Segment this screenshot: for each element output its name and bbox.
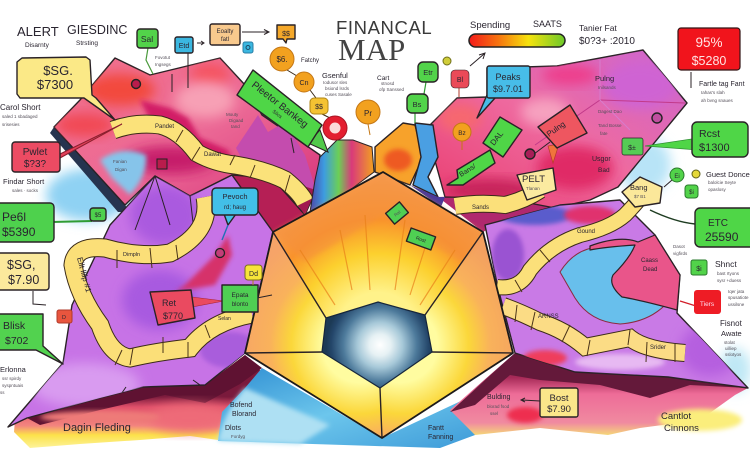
callout: green Rcst $1300: Rcst xyxy=(699,128,720,140)
tag: blue top: Etd xyxy=(179,43,189,50)
marker: orange circle centre xyxy=(356,100,380,135)
marker: ring on road xyxy=(216,248,224,258)
label: Fanian Digan: Digan xyxy=(115,167,127,172)
label: Bulding: ssel xyxy=(490,411,498,416)
callout: green ETC: ETC xyxy=(708,218,728,229)
tag: green box small xyxy=(685,185,698,198)
panel: left rainbow strip xyxy=(310,140,374,212)
heading: alert group: ALERT xyxy=(17,24,59,39)
text: Dasot: vigfirds xyxy=(673,251,688,256)
label: Bulding: blorad fsod xyxy=(487,404,510,409)
label: Fantt Fanning: Fanning xyxy=(428,434,453,441)
callout: red Ret $770: Ret xyxy=(162,298,177,308)
text: Shnct: bast rtyons xyxy=(717,271,740,276)
label: Dagin Fleding: Dagin Fleding xyxy=(63,422,131,434)
marker: dark badge xyxy=(157,159,167,169)
text: Gsenful: Iodusor sles xyxy=(323,80,348,85)
callout: red Ret $770: $770 xyxy=(163,311,183,321)
road: top-left xyxy=(113,124,305,202)
tag: green box Shnct: $i xyxy=(696,266,702,273)
text: Guest Donce: opaslosy xyxy=(708,187,727,192)
callout: yellow $SG, $7.90: $7.90 xyxy=(8,273,39,287)
callout: green Pulsing arrow: DAL xyxy=(488,129,505,147)
arrow: to Bost box xyxy=(521,398,540,402)
marker: orange on right map: Bz xyxy=(458,130,466,137)
title: MAP xyxy=(338,32,405,67)
label: Mouty Digaad: tand xyxy=(231,124,240,129)
label: Pandet: Pandet xyxy=(155,124,174,130)
chain: orange markers xyxy=(270,47,347,140)
text: Gsenful xyxy=(322,71,352,97)
box: PELT xyxy=(517,168,556,200)
callout: Bost $7.90: $7.90 xyxy=(547,404,571,415)
text: red side: ussilsne xyxy=(728,302,745,307)
labels: right map: fate xyxy=(600,131,608,136)
pink area xyxy=(590,235,680,310)
text: Erlonna xyxy=(0,365,27,395)
connector: blue line xyxy=(222,225,228,240)
callout: red Pwlet: Pwlet xyxy=(23,147,47,158)
text: Dasot xyxy=(673,244,688,256)
callout: Bost $7.90 xyxy=(540,388,578,417)
tag: small red: D xyxy=(62,315,66,321)
arrow: peach to orange xyxy=(242,30,269,34)
label: Bofend Blorand: Dlots xyxy=(225,425,241,432)
label: Cantlot Cinnons xyxy=(661,411,699,434)
tag: orange top xyxy=(277,25,295,43)
callout: blue Pevoch: Pevoch xyxy=(222,192,248,201)
panel: bottom-right band xyxy=(450,353,748,435)
text: Guest Donce: balolcie Seyte xyxy=(708,180,737,185)
panel: top-left pink map xyxy=(50,58,320,232)
text: Shnct: Shnct xyxy=(715,259,737,269)
text: Gsenful: Gsenful xyxy=(322,71,348,80)
panel: violet sliver under the blue strip xyxy=(410,185,445,207)
tag: red small: Bl xyxy=(457,77,464,84)
lake xyxy=(560,245,668,324)
tag: green top Sal xyxy=(137,29,158,74)
text: Cart: Cart xyxy=(377,75,389,82)
callout: green Blisk $702 xyxy=(0,314,63,364)
label: Mouty Digaad: Mouty xyxy=(226,112,239,117)
text: red side xyxy=(728,289,749,307)
label: Mouty Digaad: Digaad xyxy=(229,118,244,123)
text: small top: Ingsegs xyxy=(155,62,172,67)
callout: top-left yellow $SG. $7300 xyxy=(17,57,115,120)
marker: dark blob centre xyxy=(525,149,535,159)
text: red side: Iqer jata xyxy=(728,289,745,294)
label: Selan: Selan xyxy=(218,316,231,322)
panel: blue strip xyxy=(413,123,438,197)
text: Tanier Fat xyxy=(579,23,635,47)
labels: right map: Inilsands xyxy=(598,85,617,90)
callout: green Blisk $702: $702 xyxy=(5,335,29,347)
callout: red Ret $770 xyxy=(150,290,224,325)
tag: green Bs xyxy=(407,94,428,123)
tag: small blue xyxy=(243,42,253,53)
tag: yellow small xyxy=(245,265,262,285)
callout: yellow $SG, $7.90: $SG, xyxy=(7,258,36,272)
connector: red tag xyxy=(680,301,696,306)
label: Bofend Blorand: Fordyg xyxy=(231,434,246,439)
panel: right lower map xyxy=(485,200,748,388)
callout: top-left yellow $SG. $7300: $SG. xyxy=(43,63,73,78)
label: Fantt Fanning: Fantt xyxy=(428,425,444,432)
tag: green box small: $i xyxy=(689,190,694,196)
label: Dimpln: Dimpln xyxy=(123,252,140,258)
text: Fartle tag: Iahas's slah xyxy=(701,90,725,95)
legend: spending bar: Spending xyxy=(470,20,510,31)
label: Bofend Blorand: Blorand xyxy=(232,411,256,418)
labels: right map: Dagest Dao xyxy=(598,109,622,114)
text: Tanier Fat: $0?3+ :2010 xyxy=(579,36,635,47)
box: peach top xyxy=(210,24,240,45)
callout: Bost $7.90: Bost xyxy=(549,393,569,404)
label: Cantlot Cinnons: Cinnons xyxy=(664,423,699,434)
panel: left purple map xyxy=(8,175,273,427)
text: red side: spusatiote xyxy=(728,295,749,300)
tag: orange top: $$ xyxy=(282,31,290,38)
box: PELT: Tlanan xyxy=(526,186,540,191)
connector: big green callout xyxy=(291,138,294,153)
panel: right pink map xyxy=(430,50,687,208)
label: Dawat: Dawat xyxy=(204,152,221,158)
tag: red small xyxy=(451,70,469,97)
callout: green Pulsing arrow: Bans/ xyxy=(458,163,477,179)
callout: red 95%: $5280 xyxy=(692,54,726,68)
heading: alert group: Disarnty xyxy=(25,42,50,49)
callout: big green rotated: Silos xyxy=(271,109,283,121)
callout: green Epata: blonto xyxy=(232,302,249,308)
text: Erlonna: ssr spirdy xyxy=(2,376,22,381)
tag: red Tiers xyxy=(694,290,721,314)
heading: alert group xyxy=(17,23,127,49)
text: Fisnot Awate: Awate xyxy=(721,329,742,338)
label: Srider: Srider xyxy=(650,345,666,351)
label: Fanian Digan: Fanian xyxy=(113,159,127,164)
callout: green Epata: Epata xyxy=(232,292,249,299)
callout: blue Peaks: Peaks xyxy=(495,72,521,82)
tag: blue top xyxy=(175,37,193,53)
text: Dasot: Dasot xyxy=(673,244,686,249)
label: Fantt Fanning xyxy=(428,425,453,441)
connector: green chain right xyxy=(664,180,672,187)
callout: green ETC xyxy=(650,208,750,247)
text: Cart xyxy=(377,75,405,92)
panel: central hexagon xyxy=(245,172,513,438)
callout: green ETC: 25590 xyxy=(705,230,739,244)
wash: blue background tints xyxy=(46,137,750,392)
panel: dark wedge under the right map xyxy=(438,195,560,232)
tag: green small xyxy=(622,138,643,155)
labels: right map xyxy=(592,74,622,174)
label: Caass Dead: Dead xyxy=(643,267,657,273)
tag: green Bs: Bs xyxy=(413,100,422,109)
panel: bottom-left band xyxy=(14,355,270,448)
tag: green box Shnct xyxy=(691,260,707,275)
title xyxy=(336,17,432,67)
marker: orange circle centre: Pr xyxy=(364,109,372,118)
text: Tanier Fat: Tanier Fat xyxy=(579,23,617,33)
box: PELT: PELT xyxy=(522,174,545,185)
callout: red 95% xyxy=(678,28,740,70)
box: peach top: fatl xyxy=(221,37,229,43)
title: FINANCAL xyxy=(336,17,432,38)
callout: red Pwlet: $?3? xyxy=(24,159,47,170)
marker: green circle: Ei xyxy=(674,174,680,180)
text: Carol Short: Carol Short xyxy=(0,103,41,112)
label: road vertical text: Eilt lliip #1 xyxy=(75,256,93,294)
callout: red 95%: 95% xyxy=(695,35,723,50)
text: Fisnot Awate: Fisnot xyxy=(720,319,743,328)
labels: right map: Usgor xyxy=(592,156,611,163)
connector: yellow callout xyxy=(33,291,46,305)
marker: circle 2: Cn xyxy=(300,80,309,87)
heading: alert group: Strsting xyxy=(76,40,98,47)
box: Bang label: Bang xyxy=(630,183,648,192)
text: Fisnot Awate xyxy=(720,319,743,357)
callout: green Pe6l $5390: Pe6l xyxy=(2,210,26,224)
tag: green Etr: Etr xyxy=(423,68,433,77)
text: Carol Short: saled 1 sbadaged xyxy=(2,114,38,119)
tag: green on hexagon mid: Rost xyxy=(415,235,427,245)
tag: small green xyxy=(90,208,106,221)
callout: yellow $SG, $7.90 xyxy=(0,253,49,290)
label: Caass Dead xyxy=(641,258,658,273)
callout: green Blisk $702: Blisk xyxy=(3,320,26,332)
callout: red rotated xyxy=(534,105,587,163)
text: Cart: ofp Sanssed xyxy=(379,87,405,92)
labels: right map: Bad xyxy=(598,167,610,174)
label: Mouty Digaad xyxy=(226,112,244,129)
text: Gsenful: cuses Sasale xyxy=(325,92,352,97)
text: Shnct xyxy=(715,259,742,283)
text: small top: Fovotut xyxy=(155,55,171,60)
text: Fartle tag: Fartle tag Fant xyxy=(699,81,745,88)
arrow: to legend xyxy=(470,53,485,66)
road: right upper xyxy=(455,168,556,211)
label: Bofend Blorand: Bofend xyxy=(230,402,252,409)
callout: green Epata xyxy=(222,285,272,312)
panel: bottom-centre blue band xyxy=(218,368,480,448)
callout: blue Pevoch xyxy=(212,188,258,225)
text: Erlonna: Erlonna xyxy=(0,365,27,374)
label: Bofend Blorand xyxy=(225,402,256,439)
text: Findar Short: sales · socks xyxy=(12,188,39,193)
callout: green Pulsing arrow xyxy=(447,117,522,185)
road: left serpentine xyxy=(73,197,252,365)
callout: green Pe6l $5390: $5390 xyxy=(2,225,36,239)
text: Findar Short: Findar Short xyxy=(3,177,45,186)
callout: big green rotated: Pleetor Bankeg xyxy=(249,80,310,130)
callout: green Rcst $1300: $1300 xyxy=(699,142,730,154)
tag: green small: $± xyxy=(628,145,636,152)
marker: red circle xyxy=(323,116,347,140)
marker: yellow dot right xyxy=(692,170,700,178)
marker: dark blob right xyxy=(652,113,662,123)
label: Caass Dead: Caass xyxy=(641,258,658,264)
text: Fartle tag: ah bvng snaues xyxy=(701,98,734,103)
callout: blue Pevoch: rd; haug xyxy=(224,205,246,211)
text: Findar Short xyxy=(3,177,45,193)
callout: blue Peaks: $9.7.01 xyxy=(493,84,523,94)
marker: circle 1: $6. xyxy=(276,55,288,64)
tag: green Etr xyxy=(418,62,438,94)
road: right mid xyxy=(497,192,645,292)
text: Guest Donce: Guest Donce xyxy=(706,170,750,179)
tag: green on hexagon top xyxy=(386,202,408,224)
label: Bulding: Bulding xyxy=(487,394,510,401)
label: Bulding xyxy=(487,394,510,416)
heading: alert group: GIESDINC xyxy=(67,23,127,37)
text: Fisnot Awate: uilliep xyxy=(725,346,737,351)
box: peach top: Eoalty xyxy=(217,29,233,35)
road: right lower xyxy=(503,305,685,362)
arrow: small top xyxy=(197,41,204,45)
text: Carol Short xyxy=(0,103,41,127)
box: Bang label: $7 B1 xyxy=(634,194,646,199)
text: Fisnot Awate: stolat xyxy=(724,340,736,345)
legend: spending bar: SAATS xyxy=(533,19,562,29)
eye: dark-blue core xyxy=(322,302,432,388)
label: Cantlot Cinnons: Cantlot xyxy=(661,411,691,422)
label: Fanian Digan xyxy=(113,159,127,172)
text: Carol Short: srisesies xyxy=(2,122,20,127)
callout: green Pe6l $5390 xyxy=(0,203,92,242)
callout: red rotated: Pulng xyxy=(545,120,567,139)
text: Fartle tag xyxy=(699,81,745,103)
tag: small red xyxy=(57,310,72,323)
text: Fatchy: Fatchy xyxy=(301,58,319,64)
marker: green circle xyxy=(670,168,684,182)
text: small top xyxy=(155,55,172,67)
connector: red callout xyxy=(690,72,692,88)
decoration: orange strip red core xyxy=(384,149,412,171)
marker: square 3: $$ xyxy=(315,104,323,111)
text: Shnct: sysr +duess xyxy=(717,278,742,283)
text: Erlonna: ss xyxy=(0,390,5,395)
text: Erlonna: syspntuais xyxy=(2,383,24,388)
text: Fisnot Awate: sslotyos xyxy=(725,352,742,357)
text: Guest Donce xyxy=(706,170,750,192)
callout: blue Peaks xyxy=(477,66,530,118)
text: Gsenful: bsiond lsrds xyxy=(325,86,350,91)
callout: green Rcst $1300 xyxy=(645,122,748,157)
marker: yellow dot xyxy=(443,57,451,65)
box: Bang label xyxy=(622,177,662,207)
label: ARNSS: ARNSS xyxy=(538,314,559,320)
legend: spending bar xyxy=(469,19,565,47)
label: Sands: Sands xyxy=(472,205,489,211)
tag: red Tiers: Tiers xyxy=(700,301,715,308)
text: Cart: stnosd xyxy=(381,81,395,86)
label: Gound: Gound xyxy=(577,229,595,235)
tag: small green: $5 xyxy=(95,213,102,219)
labels: right map: Tand Bosse xyxy=(598,123,622,128)
marker: dark circle xyxy=(132,80,140,88)
tag: green on hexagon top: Rat xyxy=(393,209,402,218)
callout: top-left yellow $SG. $7300: $7300 xyxy=(37,77,73,92)
callout: big green rotated xyxy=(237,70,328,152)
marker: orange on right map xyxy=(453,123,471,150)
panel: orange strip xyxy=(375,123,423,185)
labels: right map: Pulng xyxy=(595,74,614,83)
tag: green top Sal: Sal xyxy=(141,34,153,44)
callout: red Pwlet xyxy=(12,124,122,172)
decoration: pin stems on pink map xyxy=(172,53,188,92)
tag: yellow small: Dd xyxy=(249,271,258,278)
tag: green on hexagon mid xyxy=(406,228,436,250)
